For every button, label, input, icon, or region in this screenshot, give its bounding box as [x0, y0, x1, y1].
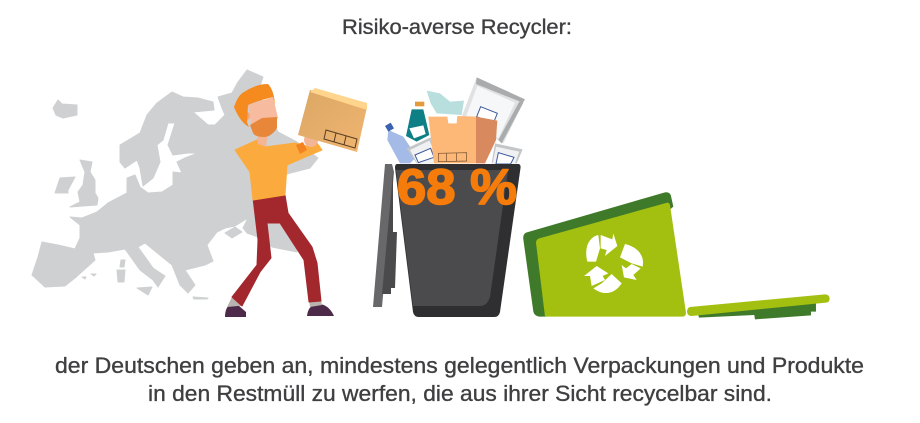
- bag: [462, 77, 525, 143]
- bin body: [395, 164, 521, 317]
- black bin with lid: [373, 164, 521, 317]
- socks: [227, 297, 322, 307]
- Iceland: [53, 100, 77, 118]
- sweater: [235, 140, 322, 200]
- Sicily: [137, 287, 152, 295]
- map of Europe: [32, 70, 318, 299]
- cardboard box held by man: [298, 88, 367, 152]
- plastic film: [427, 91, 464, 115]
- small package left: [407, 137, 443, 163]
- water bottle: [387, 130, 417, 163]
- package right: [492, 143, 523, 163]
- cuff: [296, 142, 307, 154]
- Balearics: [82, 274, 96, 279]
- box labels: [324, 130, 357, 148]
- beard: [250, 117, 277, 137]
- percentage value: 68 %: [397, 159, 517, 215]
- hand: [304, 133, 318, 147]
- man carrying a box: [225, 84, 334, 317]
- description text: [55, 353, 864, 406]
- green recycling bin tipped over: [523, 192, 830, 319]
- Ireland: [55, 177, 75, 193]
- Crete: [193, 297, 208, 299]
- cardboard box: [428, 116, 477, 163]
- hair: [234, 84, 275, 127]
- icon: recycling symbol: [584, 233, 643, 293]
- title: Risiko-averse Recycler:: [342, 16, 572, 39]
- ear: [240, 111, 250, 121]
- description text: in den Restmüll zu werfen, die aus ihrer Sicht recycelbar sind.: [148, 381, 772, 406]
- Crimea: [225, 227, 242, 238]
- neck: [257, 132, 268, 147]
- waste pile in bin: [385, 77, 525, 164]
- Sardinia: [117, 270, 125, 282]
- detergent bottle: [406, 109, 429, 142]
- open lid: [373, 164, 394, 307]
- shoes: [225, 304, 334, 317]
- Corsica: [120, 260, 125, 267]
- Great Britain: [70, 160, 98, 207]
- head: [248, 97, 278, 137]
- lid underside: [698, 303, 816, 319]
- lid: [687, 294, 830, 316]
- description text: der Deutschen geben an, mindestens gelegentlich Verpackungen und Produkte: [55, 353, 864, 378]
- bin face: [396, 170, 508, 306]
- trousers: [232, 195, 321, 306]
